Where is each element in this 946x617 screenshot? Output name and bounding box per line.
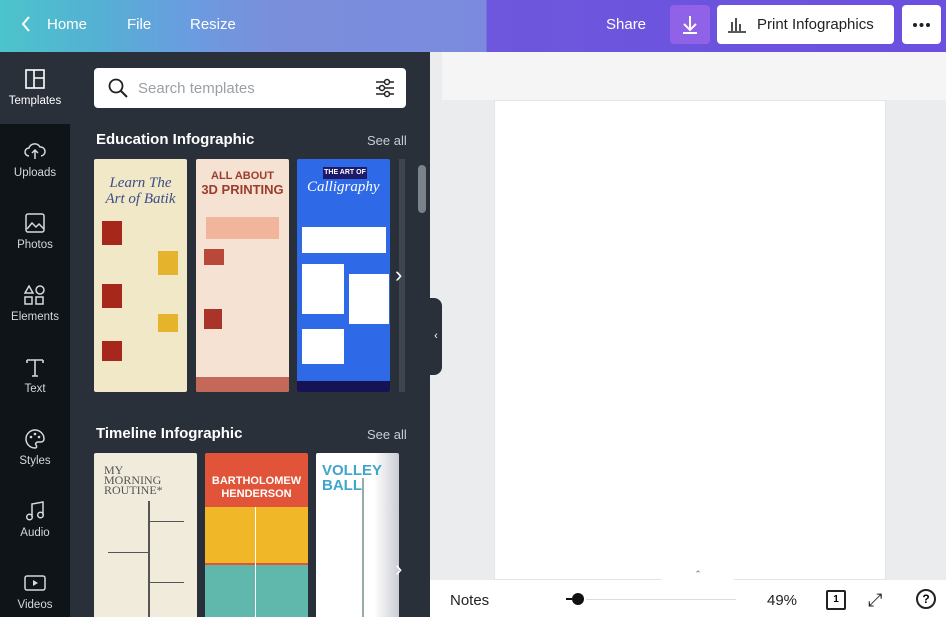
rail: photos: Photos <box>17 239 53 251</box>
help icon: ? <box>922 592 930 606</box>
resize menu: Resize <box>190 16 236 33</box>
page count icon: 1 <box>833 594 839 605</box>
rail: text <box>24 359 46 395</box>
thumbnail: calligraphy: Calligraphy <box>307 179 380 195</box>
templates panel <box>70 52 430 617</box>
rail: audio <box>20 501 50 539</box>
left rail <box>0 52 70 617</box>
thumbnail: morning routine: MORNING <box>104 473 161 487</box>
file menu: File <box>127 16 151 33</box>
thumbnail: batik: Learn The <box>109 175 172 191</box>
back chevron <box>22 16 30 32</box>
rail: text: Text <box>24 383 46 395</box>
page count icon <box>826 590 846 610</box>
notes expand tab <box>662 569 734 581</box>
thumbnail: 3d printing <box>196 159 289 392</box>
thumbnail: bartholomew henderson: HENDERSON <box>221 488 292 500</box>
rail: templates <box>9 69 61 107</box>
home link: Home <box>47 16 87 33</box>
canvas area <box>442 52 946 100</box>
see all timeline: See all <box>367 427 407 442</box>
arrow: next timeline: › <box>395 556 402 581</box>
thumbnail: batik <box>94 159 187 392</box>
print infographics button: Print Infographics <box>757 16 874 33</box>
arrow: next education: › <box>395 262 402 287</box>
rail: videos <box>18 575 52 611</box>
blank page <box>494 100 886 580</box>
thumbnail: 3d printing: 3D PRINTING <box>201 182 284 197</box>
share button: Share <box>606 16 646 33</box>
heading: timeline infographic: Timeline Infographic <box>96 425 242 442</box>
thumbnail: batik: Art of Batik <box>106 191 176 207</box>
rail: templates: Templates <box>9 95 61 107</box>
rail: audio: Audio <box>20 527 50 539</box>
thumbnail: volleyball: BALL <box>322 477 362 494</box>
more button <box>902 5 941 44</box>
search box <box>94 68 406 108</box>
collapse tab <box>430 298 442 375</box>
thumbnail: calligraphy <box>297 159 390 392</box>
thumbnail: volleyball <box>316 453 399 617</box>
heading: education infographic: Education Infographic <box>96 131 254 148</box>
help icon <box>916 589 936 609</box>
download button <box>670 5 710 44</box>
bottom bar <box>430 580 946 617</box>
collapse tab: ‹ <box>434 330 438 342</box>
print infographics button <box>717 5 894 44</box>
thumbnail: 3d printing: ALL ABOUT <box>211 170 274 182</box>
rail: uploads: Uploads <box>14 167 56 179</box>
thumbnail: bartholomew henderson <box>205 453 308 617</box>
rail: videos: Videos <box>18 599 52 611</box>
thumbnail: morning routine: MY <box>104 463 123 477</box>
top bar <box>0 0 946 52</box>
fullscreen icon: ⤢ <box>868 590 882 610</box>
thumbnail: volleyball: VOLLEY <box>322 462 382 479</box>
zoom slider <box>566 593 736 605</box>
thumbnail: calligraphy: THE ART OF <box>324 169 366 176</box>
rail: photos <box>17 213 53 251</box>
thumbnail: bartholomew henderson: BARTHOLOMEW <box>212 475 301 487</box>
zoom percent: 49% <box>767 592 797 609</box>
rail: styles <box>19 429 51 467</box>
thumbnail: morning routine: ROUTINE* <box>104 483 163 497</box>
rail: elements <box>11 285 59 323</box>
thumbnail: morning routine <box>94 453 197 617</box>
rail: uploads <box>14 143 56 179</box>
search box: Search templates <box>138 80 255 97</box>
notes expand tab: ⌃ <box>694 569 702 579</box>
see all education: See all <box>367 133 407 148</box>
notes label: Notes <box>450 592 489 609</box>
rail: styles: Styles <box>19 455 51 467</box>
partial thumbnail strip <box>399 159 405 392</box>
rail: elements: Elements <box>11 311 59 323</box>
scrollbar <box>418 165 426 213</box>
